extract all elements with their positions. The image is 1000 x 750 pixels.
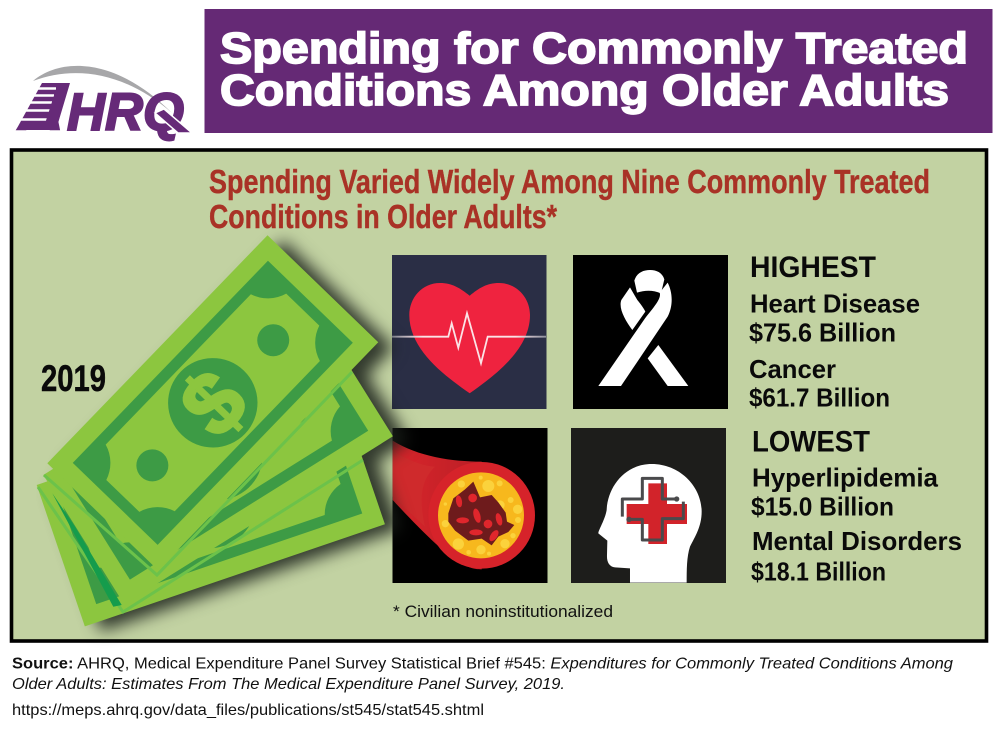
main green panel: [12, 150, 986, 641]
lowest spending list: $15.0 Billion: [751, 492, 894, 522]
logo letter A: A: [16, 83, 64, 142]
source note: Source: AHRQ, Medical Expenditure Panel Survey Statistical Brief #545: Expenditures for Commonly Treated Conditions Among: [12, 656, 953, 672]
lowest spending list: LOWEST: [752, 426, 870, 459]
icon: artery plaque: [392, 428, 548, 583]
year label: 2019: [41, 358, 106, 399]
highest spending list: Heart Disease: [750, 289, 920, 319]
source note: Older Adults: Estimates From The Medical Expenditure Panel Survey, 2019.: [12, 676, 565, 693]
title banner: [204, 9, 992, 133]
highest spending list: Cancer: [749, 354, 836, 384]
logo stripes: [16, 83, 60, 130]
middle bill edge tint: [44, 372, 352, 575]
source note: [12, 656, 953, 719]
logo Q tail: [155, 109, 192, 133]
icon: mental health head: [571, 428, 726, 583]
icon: heart disease: [392, 255, 546, 409]
dollar sign: $: [161, 351, 266, 455]
title line 2: Conditions Among Older Adults: [220, 66, 949, 115]
title line 1: Spending for Commonly Treated: [220, 24, 968, 73]
lowest spending list: [751, 426, 962, 587]
middle bill: [43, 307, 393, 604]
footnote: * Civilian noninstitutionalized: [393, 602, 613, 621]
logo arc: [33, 66, 172, 113]
top bill: [47, 235, 378, 570]
highest spending list: [749, 251, 920, 413]
logo letters HRQ: HRQ: [67, 83, 184, 142]
bottom bill overlap tint: [52, 493, 122, 607]
logo A stem: [43, 83, 70, 130]
highest spending list: $61.7 Billion: [749, 383, 890, 413]
highest spending list: $75.6 Billion: [749, 318, 896, 348]
lowest spending list: Hyperlipidemia: [752, 463, 939, 493]
AHRQ logo: [14, 66, 192, 142]
subtitle: Conditions in Older Adults*: [209, 198, 557, 235]
highest spending list: HIGHEST: [750, 251, 876, 284]
bottom bill edge tint: [38, 460, 363, 612]
icon: money bills: [37, 235, 393, 626]
lowest spending list: $18.1 Billion: [751, 557, 886, 587]
icon: cancer ribbon: [573, 255, 728, 409]
source URL: https://meps.ahrq.gov/data_files/publications/st545/stat545.shtml: [12, 702, 484, 719]
lowest spending list: Mental Disorders: [752, 526, 962, 556]
bottom bill: [37, 383, 385, 626]
subtitle: [209, 163, 930, 235]
